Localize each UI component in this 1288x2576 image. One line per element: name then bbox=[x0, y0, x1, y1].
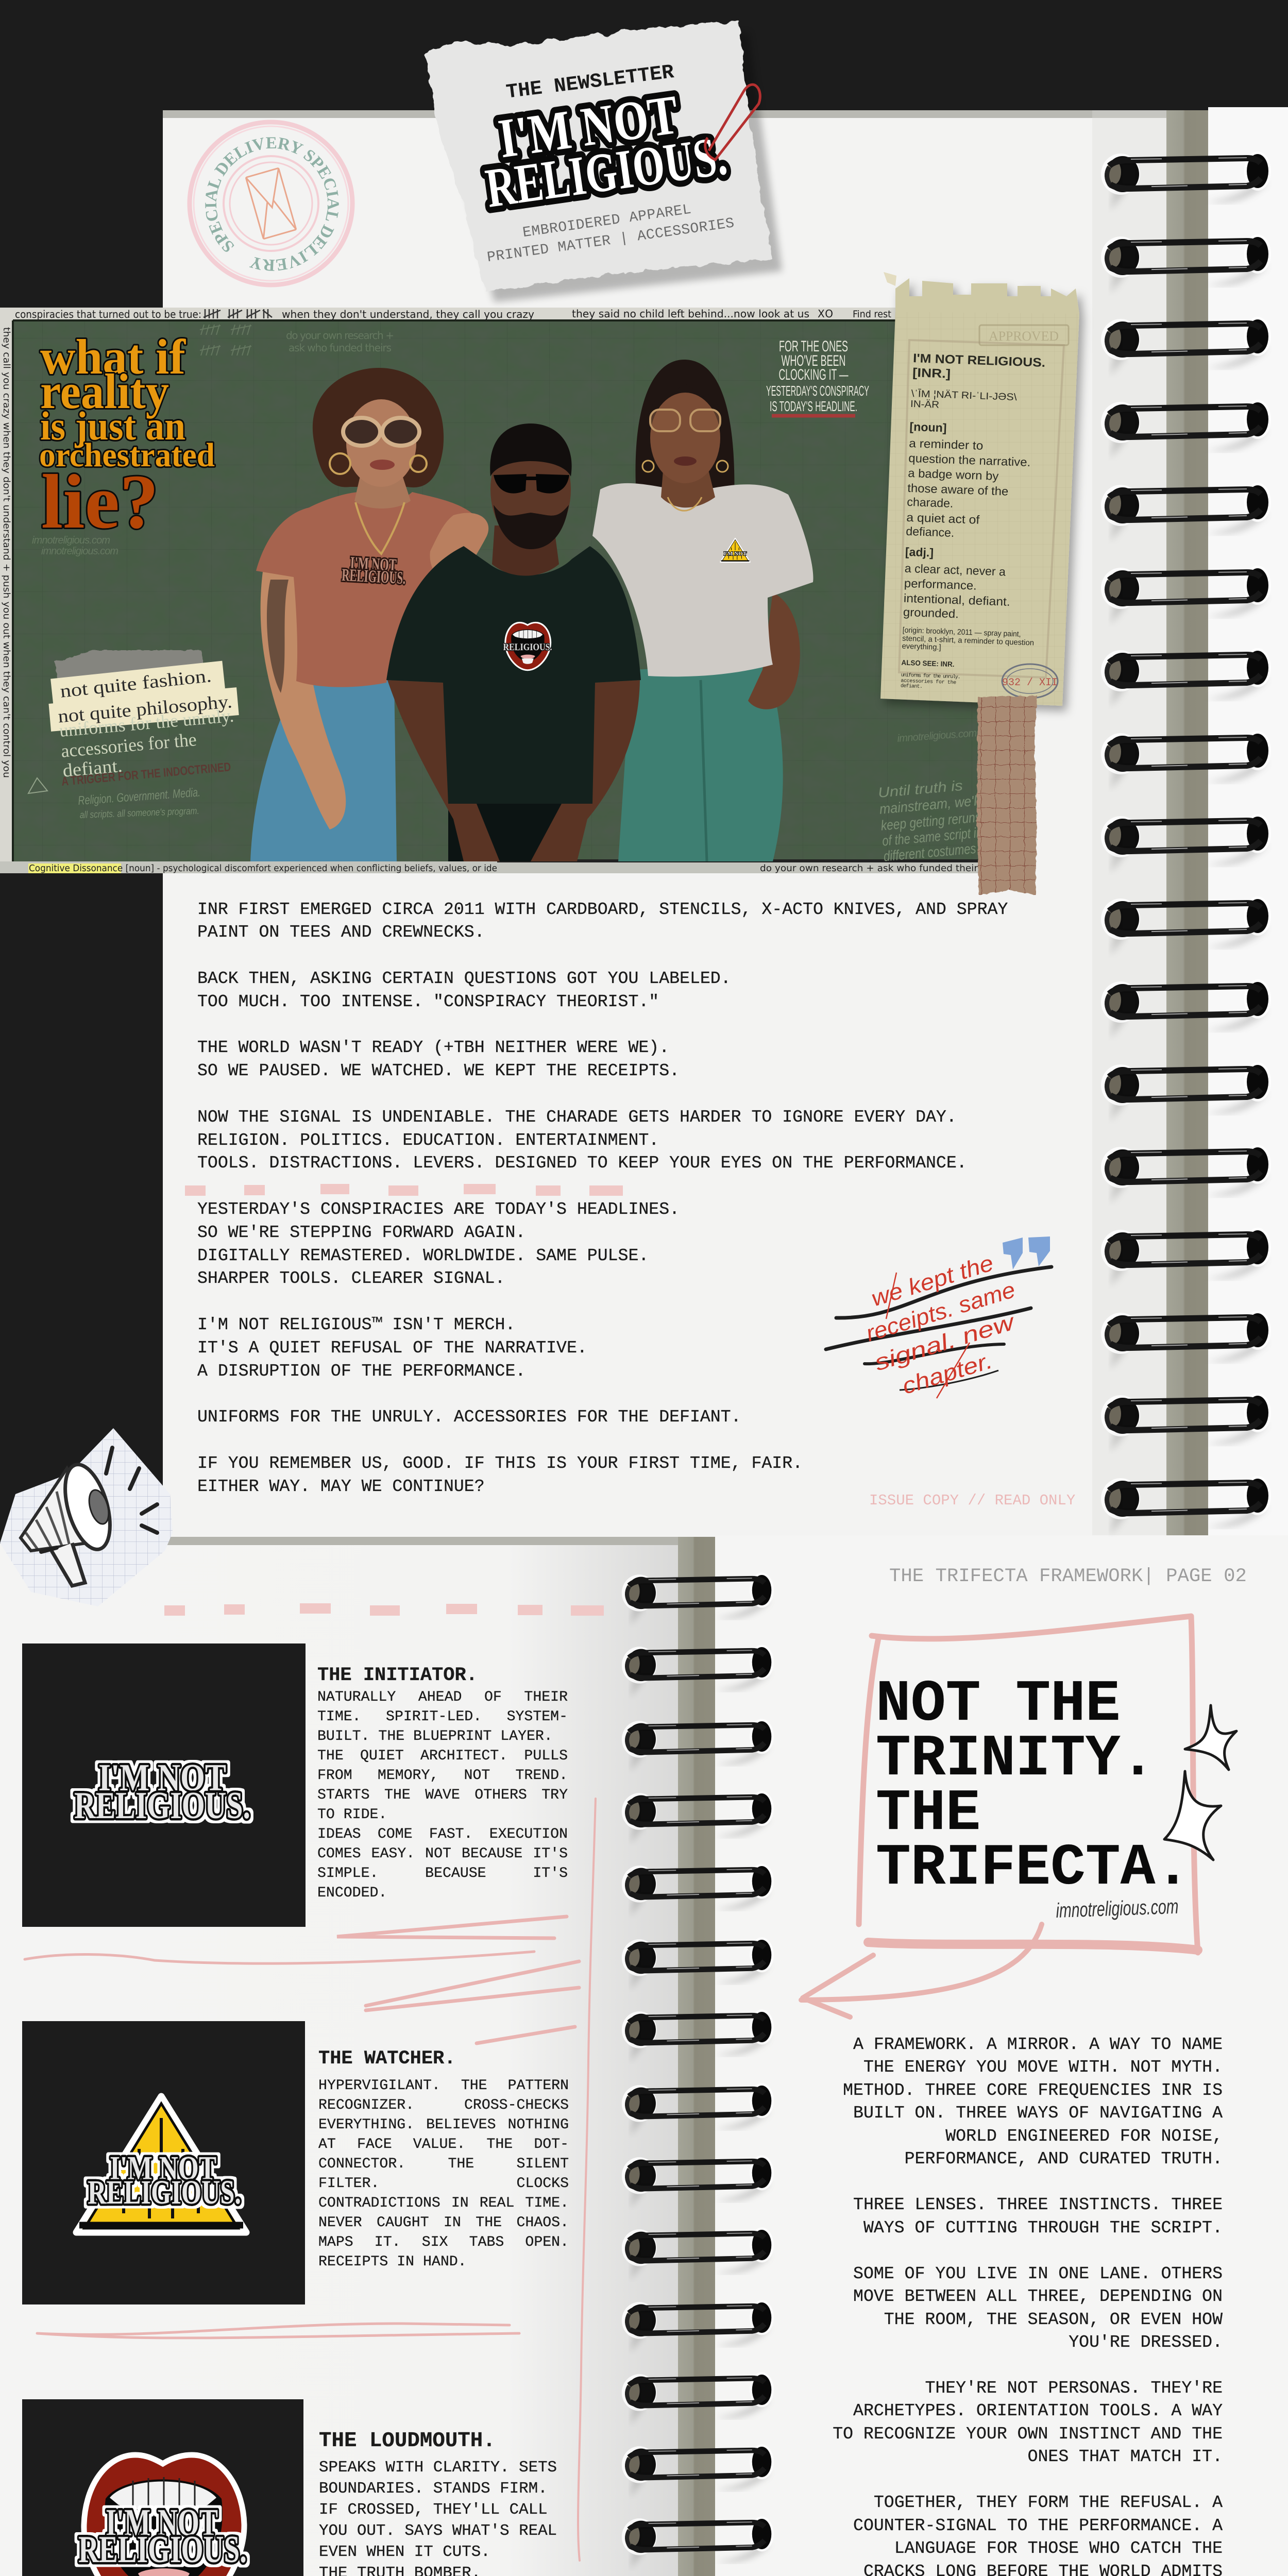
archetype: initiator copy: BUILT. THE BLUEPRINT LAYER. bbox=[317, 1728, 553, 1744]
black box: watcher: I'M NOT bbox=[110, 2149, 216, 2187]
handwritten note: we kept the receipts: signal. new bbox=[872, 1309, 1019, 1376]
archetype: initiator copy: NATURALLY AHEAD OF THEIR bbox=[317, 1689, 568, 1705]
logo: wordmark: I'M NOT bbox=[98, 1757, 226, 1799]
headline: what if reality is just an orchestrated lie? bbox=[39, 329, 215, 545]
band: top marginalia: conspiracies that turned out to be true: bbox=[15, 308, 201, 320]
black box: watcher: RELIGIOUS. bbox=[88, 2174, 241, 2211]
faint wall writing: ask who funded theirs bbox=[289, 342, 392, 354]
archetype: initiator copy: ENCODED. bbox=[317, 1885, 387, 1901]
strip: not quite philosophy bbox=[48, 687, 239, 732]
footnote: issue copy: ISSUE COPY // READ ONLY bbox=[869, 1492, 1075, 1509]
headline: what if reality is just an orchestrated lie?: reality bbox=[40, 364, 169, 419]
icon: paper clip bbox=[693, 83, 773, 161]
model: right woman bbox=[592, 360, 813, 861]
band: top marginalia: XO bbox=[818, 308, 833, 320]
callout: clocking it: CLOCKING IT — bbox=[779, 366, 848, 383]
note: dictionary definition: defiant. bbox=[901, 683, 923, 690]
archetype: initiator copy: SIMPLE. BECAUSE IT'S bbox=[317, 1866, 568, 1882]
logo: I'm not religious: RELIGIOUS. bbox=[482, 125, 731, 219]
faint wall writing: imnotreligious.com bbox=[41, 546, 118, 557]
band: bottom marginalia bbox=[28, 863, 978, 874]
shirt logo: triangle bbox=[720, 538, 750, 562]
note: dictionary definition: ALSO SEE: INR. bbox=[901, 658, 955, 668]
panel: notebook page two bbox=[0, 1535, 1288, 2576]
logo: I'm not religious: I'M NOT bbox=[495, 84, 682, 170]
scribble: pink lines, left page bbox=[25, 1799, 596, 2576]
black box: loudmouth bbox=[22, 2399, 303, 2576]
green wall bbox=[13, 320, 979, 861]
archetype: watcher copy: FILTER. CLOCKS bbox=[318, 2176, 569, 2192]
stamp: 932 / XII bbox=[1002, 664, 1058, 698]
callout: clocking it: WHO'VE BEEN bbox=[781, 352, 846, 369]
stamp: 932 / XII: 932 / XII bbox=[1002, 677, 1058, 689]
model: center man bbox=[386, 423, 641, 861]
stamp: special delivery: SPECIAL DELIVERY SPECIAL DELIVERY bbox=[205, 137, 339, 271]
note: dictionary definition: [INR.] bbox=[912, 366, 951, 381]
archetype: initiator copy: COMES EASY. NOT BECAUSE IT'S bbox=[317, 1846, 568, 1862]
shirt logo: wordmark: RELIGIOUS. bbox=[342, 566, 406, 588]
handwritten url: imnotreligious.com bbox=[1056, 1895, 1179, 1922]
stamp: approved bbox=[979, 325, 1069, 345]
stamp: approved: APPROVED bbox=[989, 329, 1059, 344]
note: dictionary definition: uniforms for the unruly. bbox=[901, 672, 961, 681]
archetype: watcher copy: EVERYTHING. BELIEVES NOTHING bbox=[318, 2117, 569, 2133]
note: dictionary definition: a reminder to bbox=[909, 436, 984, 452]
wall text: until truth: Until truth is bbox=[877, 777, 963, 801]
band: top marginalia: when they don't understand, they call you crazy bbox=[282, 308, 534, 320]
icon: megaphone sticker bbox=[0, 1428, 173, 1606]
logo: triangle bbox=[76, 2096, 246, 2232]
shirt logo: wordmark bbox=[342, 553, 407, 588]
icon: blue quotation marks bbox=[1003, 1236, 1050, 1269]
faint wall writing: THE WORLD bbox=[884, 624, 948, 635]
wall text: until truth: keep getting reruns bbox=[880, 809, 981, 834]
masthead tagline: PRINTED MATTER | ACCESSORIES bbox=[486, 215, 735, 266]
note: dictionary definition: I'M NOT RELIGIOUS. bbox=[913, 351, 1045, 370]
archetype: initiator copy: TIME. SPIRIT-LED. SYSTEM- bbox=[317, 1709, 568, 1725]
headline: what if reality is just an orchestrated lie?: orchestrated bbox=[39, 436, 215, 474]
wall text: uniforms: accessories for the bbox=[60, 729, 197, 761]
band: bottom marginalia: do your own research + ask who funded their bbox=[760, 863, 978, 874]
note: dictionary definition: a quiet act of bbox=[906, 511, 980, 527]
panel: hero photo board bbox=[0, 308, 985, 874]
note: dictionary definition: [origin: brooklyn, 2011 — spray paint, bbox=[902, 626, 1021, 639]
shirt logo: mouth bbox=[503, 622, 552, 670]
note: dictionary definition: stencil, a t-shirt, a reminder to question bbox=[902, 634, 1034, 648]
frame: pink hand-drawn box bbox=[801, 1616, 1198, 2017]
wall text: uniforms: defiant. bbox=[62, 755, 123, 781]
archetype: watcher copy: MAPS IT. SIX TABS OPEN. bbox=[318, 2234, 569, 2250]
note: dictionary definition bbox=[880, 272, 1079, 706]
faint wall writing: imnotreligious.com bbox=[897, 727, 977, 744]
handwritten note: we kept the receipts bbox=[826, 1236, 1052, 1399]
shirt logo: triangle: I'M NOT bbox=[724, 551, 747, 557]
band: left marginalia: they call you crazy when they don't understand + push you out when they can't control you bbox=[1, 327, 12, 778]
note: dictionary definition: question the narrative. bbox=[908, 451, 1031, 469]
shirt logo: wordmark: I'M NOT bbox=[350, 554, 397, 575]
band: top marginalia bbox=[15, 308, 891, 320]
wall text: uniforms bbox=[58, 705, 238, 781]
faint wall writing: imnotreligious.com bbox=[32, 535, 110, 546]
note: dictionary definition: a clear act, never a bbox=[904, 562, 1006, 579]
black box: watcher bbox=[22, 2021, 305, 2304]
wall text: until truth: mainstream, we'll bbox=[879, 792, 980, 817]
wall text: until truth: of the same script in bbox=[882, 824, 983, 849]
band: top marginalia: Find rest bbox=[853, 309, 891, 320]
divider dashes: page one bbox=[185, 1189, 623, 1191]
headline: what if reality is just an orchestrated lie?: is just an bbox=[40, 403, 185, 448]
page header: trifecta framework: THE TRIFECTA FRAMEWORK| PAGE 02 bbox=[889, 1566, 1247, 1587]
archetype: watcher copy: NEVER CAUGHT IN THE CHAOS. bbox=[318, 2215, 569, 2231]
note: dictionary definition: a badge worn by bbox=[908, 466, 999, 483]
body text: origin story: INR FIRST EMERGED CIRCA 2011 WITH CARDBOARD, STENCILS, X-ACTO KNIVES, AND SPRAY PAINT ON TEES AND CREWNECKS. BACK THEN, ASKING CERTAIN QUESTIONS GOT YOU LABELED. TOO MUCH. TOO INTENSE. "CONSPIRACY THEORIST." THE WORLD WASN'T READY (+TBH NEITHER WERE WE). SO WE PAUSED. WE WATCHED. WE KEPT THE RECEIPTS. NOW THE SIGNAL IS UNDENIABLE. THE CHARADE GETS HARDER TO IGNORE EVERY DAY. RELIGION. POLITICS. EDUCATION. ENTERTAINMENT. TOOLS. DISTRACTIONS. LEVERS. DESIGNED TO KEEP YOUR EYES ON THE PERFORMANCE. YESTERDAY'S CONSPIRACIES ARE TODAY'S HEADLINES. SO WE'RE STEPPING FORWARD AGAIN. DIGITALLY REMASTERED. WORLDWIDE. SAME PULSE. SHARPER TOOLS. CLEARER SIGNAL. I'M NOT RELIGIOUS™ ISN'T MERCH. IT'S A QUIET REFUSAL OF THE NARRATIVE. A DISRUPTION OF THE PERFORMANCE. UNIFORMS FOR THE UNRULY. ACCESSORIES FOR THE DEFIANT. IF YOU REMEMBER US, GOOD. IF THIS IS YOUR FIRST TIME, FAIR. EITHER WAY. MAY WE CONTINUE? bbox=[197, 900, 1008, 1496]
note: dictionary definition: accessories for the bbox=[901, 678, 956, 686]
shirt logo: mouth: RELIGIOUS. bbox=[503, 642, 552, 653]
archetype: watcher copy: RECEIPTS IN HAND. bbox=[318, 2254, 467, 2270]
wall text: trigger: A TRIGGER FOR THE INDOCTRINED bbox=[61, 760, 231, 789]
archetype: watcher copy: HYPERVIGILANT. THE PATTERN bbox=[318, 2078, 569, 2094]
note: dictionary definition: \ˈĪM ¦NÄT RI-ˈLI-JƏS\ bbox=[911, 388, 1018, 403]
archetype: watcher copy: CONNECTOR. THE SILENT bbox=[318, 2156, 569, 2172]
note: dictionary definition: IN-ÄR bbox=[910, 399, 939, 411]
headline: what if reality is just an orchestrated lie?: lie? bbox=[41, 459, 159, 545]
callout: clocking it: FOR THE ONES bbox=[779, 338, 848, 355]
divider dashes: page two bbox=[164, 1608, 604, 1611]
scrap: torn gray paper bbox=[55, 650, 205, 690]
faint wall writing bbox=[32, 325, 977, 744]
note: dictionary definition: those aware of the bbox=[907, 481, 1009, 498]
black box: loudmouth: RELIGIOUS. bbox=[78, 2529, 247, 2571]
archetype: initiator copy: IDEAS COME FAST. EXECUTION bbox=[317, 1826, 568, 1842]
logo: wordmark: RELIGIOUS. bbox=[74, 1785, 250, 1827]
tape: kraft grid bbox=[977, 696, 1037, 895]
panel: notebook page one bbox=[163, 107, 1288, 1545]
archetype: initiator copy: STARTS THE WAVE OTHERS TRY bbox=[317, 1787, 568, 1803]
headline: what if reality is just an orchestrated lie?: what if bbox=[40, 329, 186, 384]
wall text: uniforms: uniforms for the unruly. bbox=[58, 705, 234, 741]
black box: loudmouth: I'M NOT bbox=[106, 2502, 218, 2544]
strip: not quite fashion bbox=[50, 661, 225, 706]
masthead label: THE NEWSLETTER bbox=[505, 61, 675, 104]
arrow: pointing to text bbox=[801, 1924, 1042, 2017]
faint wall writing: IS A STAGE bbox=[884, 634, 939, 646]
band: top marginalia: they said no child left behind...now look at us bbox=[572, 308, 809, 320]
photo: three models bbox=[250, 360, 813, 861]
strip: not quite fashion: not quite fashion. bbox=[59, 665, 212, 702]
archetype: initiator copy: TO RIDE. bbox=[317, 1807, 387, 1823]
note: dictionary definition: grounded. bbox=[903, 605, 959, 620]
note: dictionary definition: [noun] bbox=[909, 420, 947, 434]
megaphone handle bbox=[52, 1543, 85, 1586]
megaphone horn bbox=[21, 1468, 106, 1551]
archetype: initiator title: THE INITIATOR. bbox=[317, 1665, 478, 1686]
handwritten note: we kept the receipts: chapter. bbox=[900, 1348, 995, 1399]
heading: not the trinity: NOT THE TRINITY. THE TRIFECTA. bbox=[876, 1671, 1190, 1901]
logo: I'm not religious bbox=[476, 78, 731, 219]
wall text: until truth bbox=[877, 776, 985, 865]
note: dictionary definition: charade. bbox=[907, 495, 954, 510]
icon: sketched sparkles bbox=[1164, 1705, 1236, 1860]
archetype: initiator copy: FROM MEMORY, NOT TREND. bbox=[317, 1768, 568, 1784]
model: left woman bbox=[250, 368, 488, 861]
spiral binding: page two bbox=[622, 1573, 774, 2576]
handwritten note: we kept the receipts: receipts. same bbox=[863, 1277, 1018, 1346]
strip: not quite philosophy: not quite philosophy. bbox=[57, 691, 233, 726]
note: dictionary definition: defiance. bbox=[906, 524, 955, 539]
wall text: scripts: all scripts. all someone's program. bbox=[79, 806, 199, 821]
archetype: watcher copy: AT FACE VALUE. THE DOT- bbox=[318, 2137, 569, 2153]
archetype: watcher copy: CONTRADICTIONS IN REAL TIME. bbox=[318, 2195, 569, 2211]
faint wall writing: do your own research + bbox=[286, 329, 394, 342]
archetype: initiator copy bbox=[317, 1689, 568, 1901]
archetype: watcher title: THE WATCHER. bbox=[318, 2048, 455, 2070]
black box: initiator bbox=[22, 1643, 306, 1927]
callout: clocking it bbox=[766, 338, 869, 416]
band: bottom marginalia: Cognitive Dissonance [noun] - psychological discomfort experienced when conflicting beliefs, values, or ide bbox=[29, 863, 497, 874]
icon: envelope bbox=[246, 168, 296, 239]
wall text: scripts bbox=[28, 778, 201, 821]
archetype: initiator copy: THE QUIET ARCHITECT. PULLS bbox=[317, 1748, 568, 1764]
note: dictionary definition: [adj.] bbox=[905, 545, 934, 560]
wall text: scripts: Religion. Government. Media. bbox=[78, 785, 201, 808]
note: dictionary definition: performance. bbox=[904, 577, 977, 592]
archetype: watcher copy: RECOGNIZER. CROSS-CHECKS bbox=[318, 2097, 569, 2113]
masthead tagline: EMBROIDERED APPAREL bbox=[522, 202, 692, 241]
handwritten note: we kept the receipts: we kept the bbox=[868, 1250, 996, 1311]
spiral binding: page one bbox=[1101, 151, 1271, 1535]
archetype: loudmouth title: THE LOUDMOUTH. bbox=[319, 2429, 496, 2453]
newsletter masthead: torn paper bbox=[425, 21, 782, 302]
wall text: until truth: different costumes bbox=[883, 840, 977, 865]
logo: mouth bbox=[84, 2455, 244, 2576]
note: dictionary definition: everything.] bbox=[902, 642, 941, 652]
archetype: watcher copy bbox=[318, 2078, 569, 2270]
logo: wordmark bbox=[74, 1757, 250, 1827]
note: dictionary definition: intentional, defiant. bbox=[903, 591, 1010, 608]
callout: clocking it: YESTERDAY'S CONSPIRACY bbox=[766, 383, 869, 399]
callout: clocking it: IS TODAY'S HEADLINE. bbox=[770, 398, 857, 414]
